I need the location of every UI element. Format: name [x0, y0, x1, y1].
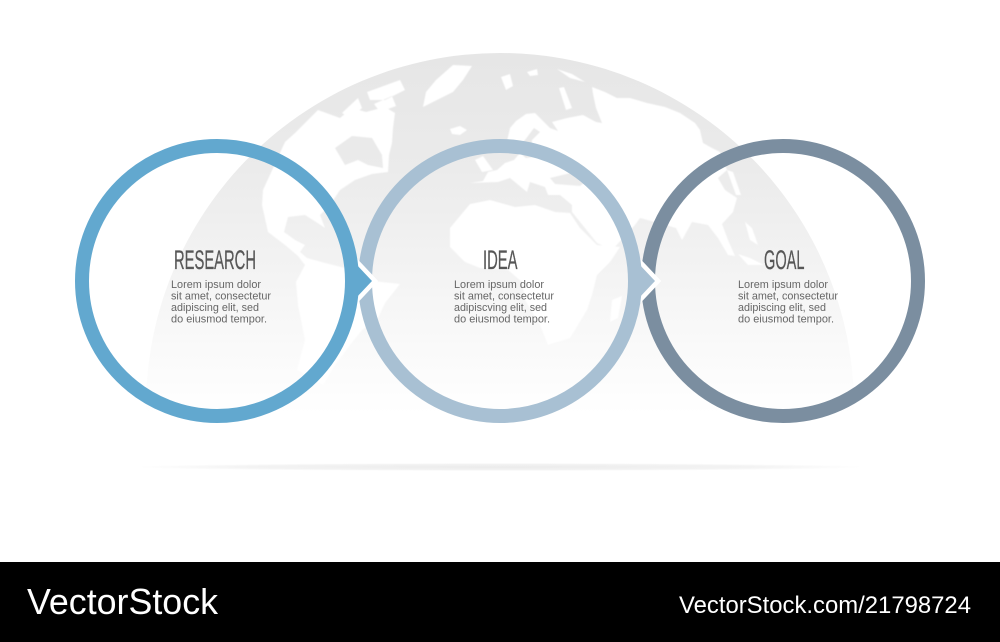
continents: [262, 65, 764, 385]
gap cut for first arrow: [355, 263, 372, 299]
research body text: [171, 279, 271, 326]
gap cut for second arrow: [638, 263, 655, 299]
idea heading: IDEA: [483, 245, 518, 275]
footer bar: [0, 562, 1000, 642]
goal body text: Lorem ipsum dolor: [738, 279, 828, 291]
idea body text: Lorem ipsum dolor: [454, 279, 544, 291]
goal body text: sit amet, consectetur: [738, 290, 838, 302]
step 2 ring: idea: [365, 146, 635, 416]
goal body text: [738, 279, 838, 326]
Greenland: [423, 65, 472, 107]
step 3 ring: goal: [648, 146, 918, 416]
goal heading: GOAL: [764, 245, 804, 275]
Japan and Southeast Asian islands: [727, 170, 764, 265]
goal text block: [738, 245, 838, 326]
research body text: Lorem ipsum dolor: [171, 279, 261, 291]
idea body text: [454, 279, 554, 326]
idea text block: [454, 245, 554, 326]
world map globe: [146, 53, 854, 420]
Madagascar: [610, 296, 622, 322]
idea body text: adipiscving elit, sed: [454, 302, 547, 314]
Iceland: [450, 126, 467, 135]
the Americas: [262, 107, 400, 385]
Arctic islands: [342, 80, 405, 118]
research body text: sit amet, consectetur: [171, 290, 271, 302]
ground shadow: [135, 463, 865, 471]
idea body text: do eiusmod tempor.: [454, 314, 550, 326]
globe disk: [146, 53, 854, 420]
research heading: RESEARCH: [174, 245, 256, 275]
footer image id: VectorStock.com/21798724: [679, 592, 971, 619]
research text block: [171, 245, 271, 326]
second arrow: [638, 263, 655, 299]
Africa: [450, 200, 620, 345]
Eurasia: [470, 87, 737, 256]
research body text: adipiscing elit, sed: [171, 302, 259, 314]
goal body text: do eiusmod tempor.: [738, 314, 834, 326]
step 1 ring: research: [82, 146, 352, 416]
research body text: do eiusmod tempor.: [171, 314, 267, 326]
Svalbard and northern islands: [501, 69, 585, 110]
idea body text: sit amet, consectetur: [454, 290, 554, 302]
British Isles: [475, 156, 493, 172]
first arrow: [355, 263, 372, 299]
goal body text: adipiscing elit, sed: [738, 302, 826, 314]
footer logo text: VectorStock: [27, 581, 219, 622]
